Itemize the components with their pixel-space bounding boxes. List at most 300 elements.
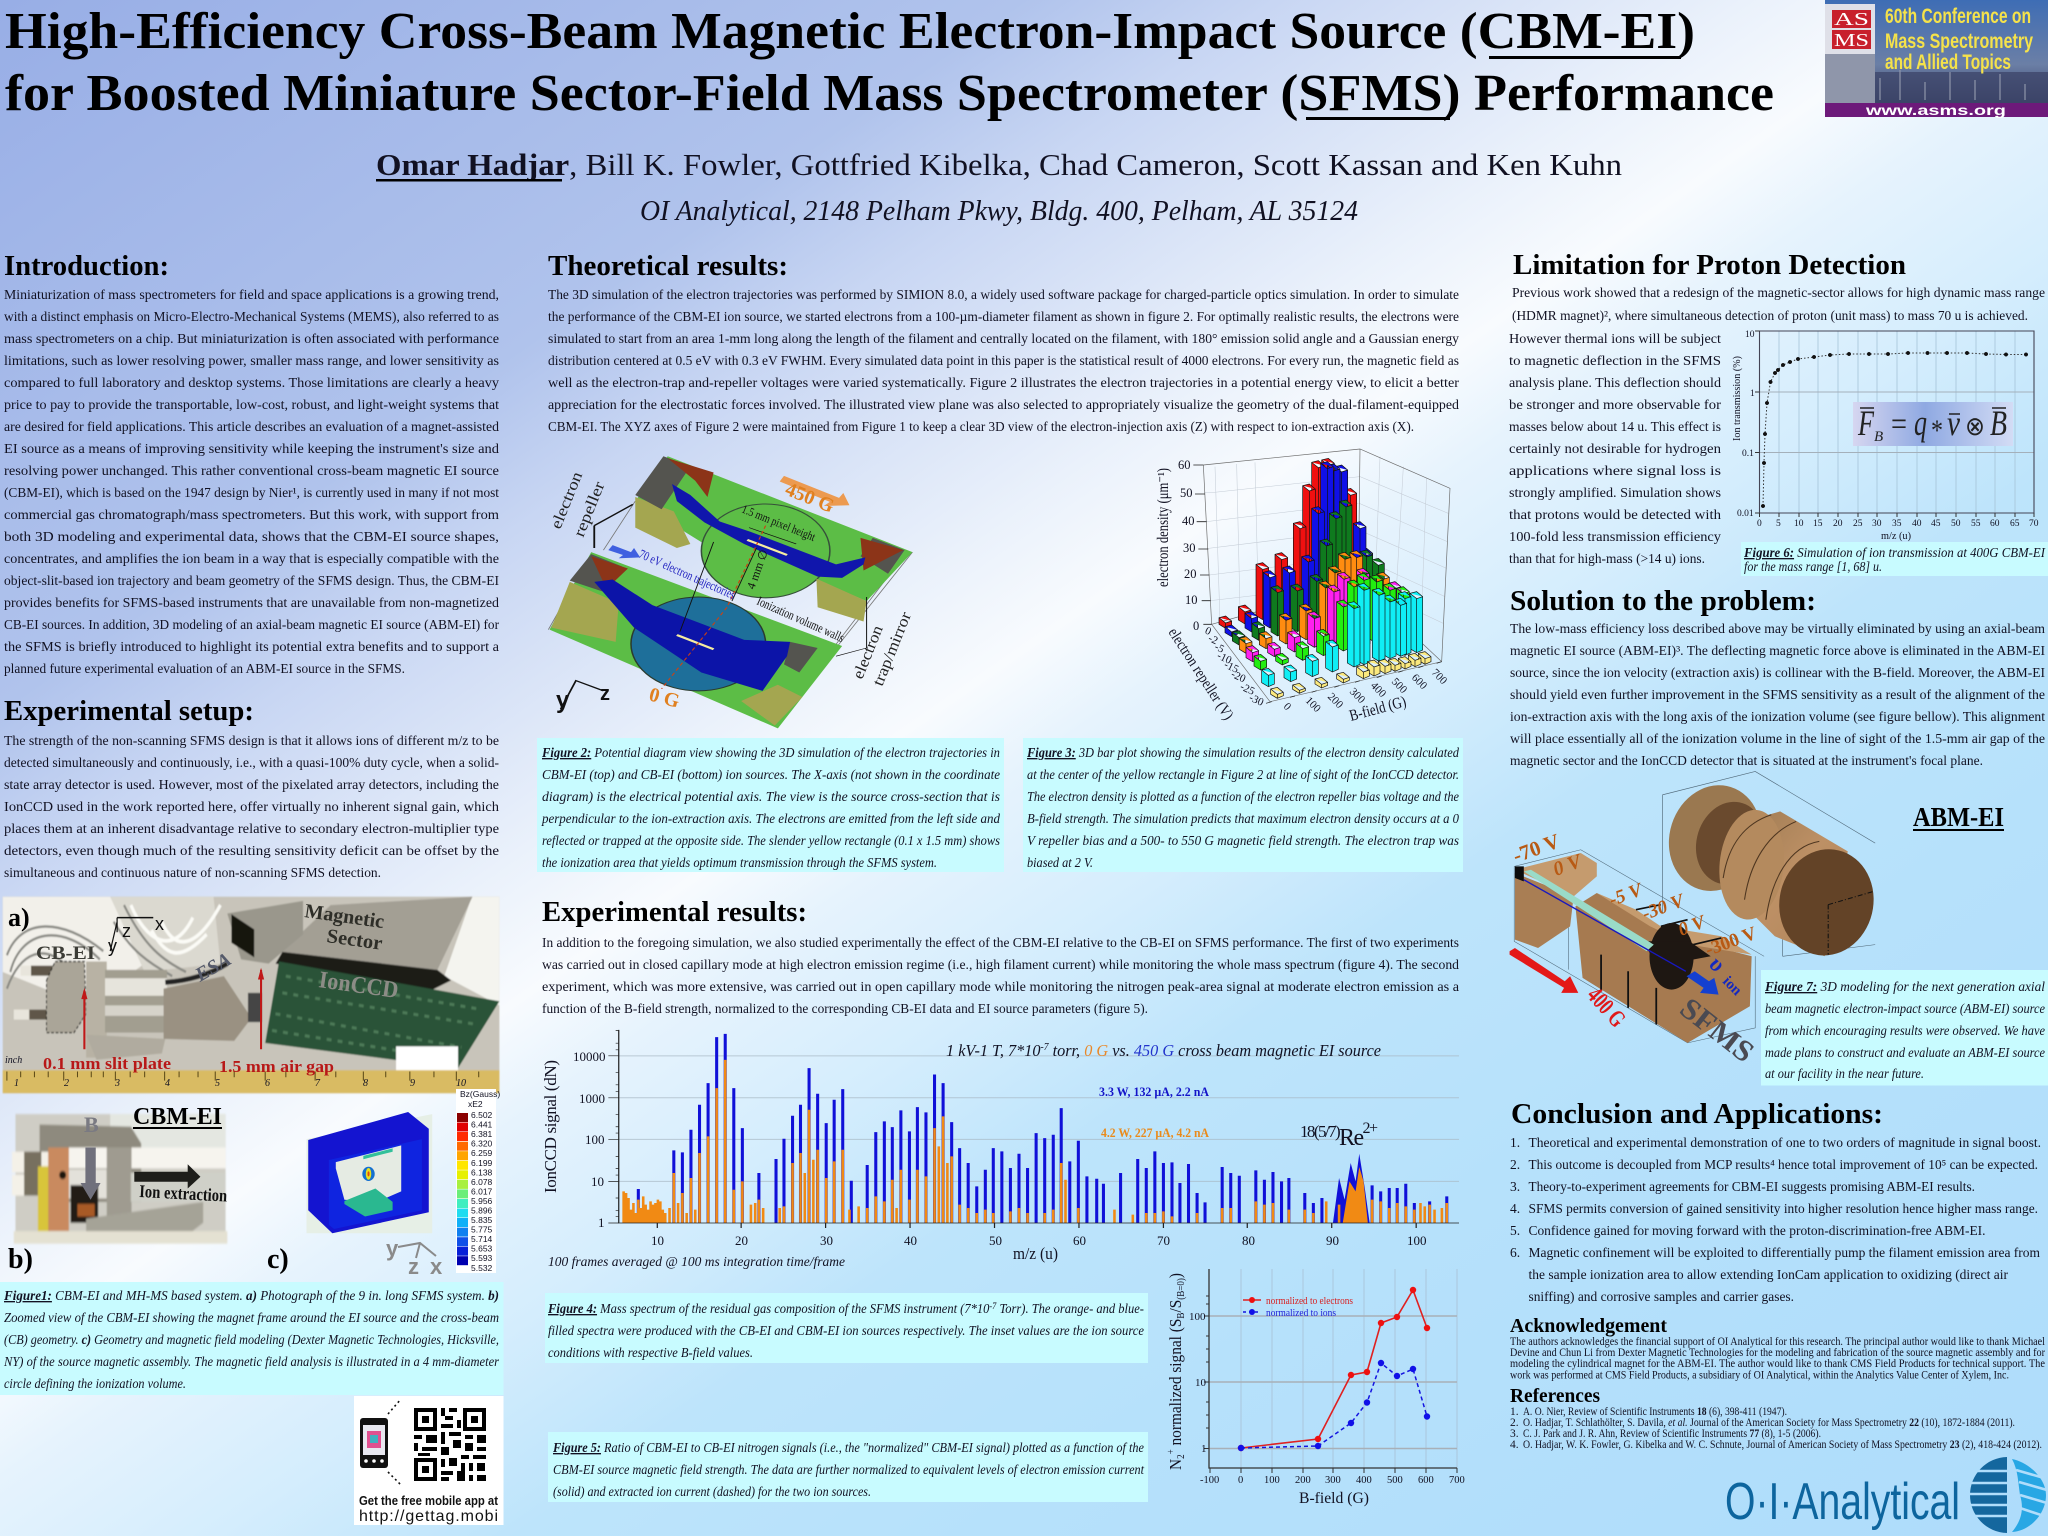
- figure 1a: instrument photograph: [3, 897, 499, 1093]
- axis labels: 70: [2029, 519, 2039, 529]
- figure 2 labels: y: [556, 687, 570, 714]
- numbered list: Magnetic confinement will be exploited to differentially pump the filament emission area from: [1528, 1245, 2040, 1260]
- reference list: O. Hadjar, W. K. Fowler, G. Kibelka and W. C. Schnute, Journal of American Society of Mass Spectrometry 23 (2), 418-424 (2012).: [1523, 1439, 2042, 1451]
- spectrum axis labels: IonCCD signal (dN): [541, 1060, 560, 1193]
- blue conditions: 3.3 W, 132 µA, 2.2 nA: [1099, 1085, 1209, 1099]
- spectrum inset title: torr,: [1049, 1041, 1084, 1060]
- caption: figure 5: (solid) and extracted ion current (dashed) for the two ion sources.: [553, 1484, 871, 1499]
- text block: experimental setup: detectors, even though much of the resulting sensitivity deficit can be offset by the: [4, 843, 499, 858]
- text block: limitation: masses below about 14 u. This effect is: [1509, 419, 1721, 434]
- figure 3 labels: 100: [1303, 695, 1323, 715]
- spectrum inset title: -7: [1041, 1042, 1049, 1053]
- label: ion extraction: Ion extraction: [139, 1181, 228, 1206]
- title: High-Efficiency Cross-Beam Magnetic Electron-Impact Source (CBM-EI): [5, 3, 1695, 60]
- text block: introduction: planned future experimental evaluation of an ABM-EI source in the SFMS.: [4, 661, 405, 676]
- chart axis labels: 1: [1201, 1443, 1206, 1455]
- panel: theoretical results: [548, 251, 1460, 434]
- chart axis labels: 300: [1325, 1475, 1341, 1486]
- orange conditions: 4.2 W, 227 µA, 4.2 nA: [1101, 1126, 1209, 1140]
- text block: introduction: [4, 287, 500, 676]
- text block: limitation: to magnetic deflection in the SFMS: [1509, 353, 1721, 368]
- axis labels: 0: [1757, 519, 1762, 529]
- figure 3 labels: 600: [1409, 672, 1430, 692]
- title: for Boosted Miniature Sector-Field Mass Spectrometer (SFMS) Performance: [5, 65, 1774, 122]
- figure 3 labels: electron density (μm⁻¹): [1155, 468, 1172, 587]
- photo labels: 5: [215, 1078, 220, 1089]
- figure 3 labels: -5: [1213, 641, 1226, 656]
- axis labels: [1732, 330, 2039, 542]
- chart axis labels: B: [1176, 1312, 1187, 1319]
- text block: limitation: certainly not desirable for hydrogen: [1509, 441, 1721, 456]
- conference logo: [1825, 0, 2048, 118]
- caption: figure 1: Zoomed view of the CBM-EI showing the magnet frame around the EI source and the cross-beam: [4, 1310, 499, 1325]
- spectrum axis labels: m/z (u): [1013, 1244, 1058, 1263]
- blue CBM-EI spectrum: [638, 1034, 1447, 1223]
- photo labels: 4: [165, 1078, 170, 1089]
- caption: figure 2: Figure 2: Potential diagram view showing the 3D simulation of the electron trajectories in: [541, 745, 1000, 760]
- formula: Lorentz force: ⊗: [1965, 412, 1985, 442]
- figure 3 labels: B-field (G): [1348, 693, 1408, 725]
- caption: figure 1: [0, 1282, 504, 1395]
- axis labels: 30: [1872, 519, 1882, 529]
- reference list: [1510, 1406, 2042, 1451]
- text block: experimental results: experiment, which was more extensive, was carried out in open capillary mode while monitoring the nitrogen peak-area signal at moderate electron emission as a: [542, 979, 1459, 994]
- text block: introduction: are desired for field applications. This article describes an evaluation of a magnet-assisted: [4, 419, 499, 434]
- text block: theoretical results: distribution centered at 0.5 eV with 0.3 eV FWHM. Every simulated data point in this paper is the statistical result of 4000 electrons. For every run, the magnetic field as: [548, 353, 1459, 368]
- reference list: O. Hadjar, T. Schlathölter, S. Davila, et al. Journal of the American Society for Mass Spectrometry 22 (10), 1872-1884 (2011).: [1523, 1417, 2015, 1429]
- formula: Lorentz force: B: [1990, 403, 2007, 443]
- OI Analytical logo: O·I·Analytical: [1725, 1473, 1960, 1531]
- text block: limitation: 100-fold less transmission efficiency: [1509, 529, 1721, 544]
- figure 7 labels: -30 V: [1640, 890, 1688, 925]
- text block: solution: The low-mass efficiency loss described above may be virtually eliminated by using an axial-beam: [1510, 621, 2045, 636]
- reference list: 4.: [1510, 1439, 1519, 1451]
- chart axis labels: +: [1166, 1449, 1177, 1454]
- spectrum inset title: 1 kV-1 T, 7*10: [946, 1041, 1045, 1060]
- figure 3 labels: 40: [1182, 514, 1194, 528]
- text block: experimental setup: places them at an inherent disadvantage relative to secondary electron-multiplier type: [4, 821, 499, 836]
- text block: solution: magnetic EI source (ABM-EI)³. The deflecting magnetic force above is eliminated in the ABM-EI: [1510, 643, 2046, 658]
- axis labels: 0.01: [1737, 509, 1754, 519]
- numbered list: 5.: [1510, 1223, 1520, 1238]
- label: CBM-EI: CBM-EI: [133, 1104, 222, 1130]
- axis labels: 10: [1794, 519, 1804, 529]
- spectrum axis labels: 10: [591, 1174, 604, 1189]
- spectrum axis labels: 50: [989, 1233, 1002, 1248]
- QR code: [414, 1408, 486, 1481]
- chart axis labels: [1166, 1273, 1465, 1507]
- formula: Lorentz force: F: [1857, 403, 1875, 443]
- colour scale legend: 6.259: [471, 1148, 493, 1158]
- colour scale legend: 5.593: [471, 1253, 493, 1263]
- photo labels: [5, 900, 466, 1089]
- figure 7 labels: 400 G: [1582, 983, 1630, 1033]
- spectrum axis labels: 40: [904, 1233, 917, 1248]
- figure 7 labels: -70 V: [1510, 829, 1563, 868]
- spectrum axis labels: 30: [820, 1233, 833, 1248]
- heading: theoretical results: Theoretical results:: [548, 251, 788, 282]
- figure 3 labels: electron repeller (V): [1165, 625, 1237, 723]
- axis labels: 60: [1990, 519, 2000, 529]
- text block: theoretical results: well as the electron-trap and-repeller voltages were varied systematically. Figure 2 illustrates the electron trajectories in a potential energy view, to elicit a better: [548, 375, 1460, 390]
- text block: introduction: with a distinct emphasis on Micro-Electro-Mechanical Systems (MEMS), also referred to as: [4, 309, 499, 324]
- photo labels: 9: [410, 1078, 415, 1089]
- text block: experimental setup: detected simultaneously and continuously, i.e., with a quasi-100% duty cycle, when a solid-: [4, 755, 499, 770]
- text block: introduction: compared to full laboratory and desktop systems. Those limitations are clearly a heavy: [4, 375, 499, 390]
- text block: solution: magnetic sector and the IonCCD detector that is situated at the instrument's focal plane.: [1510, 753, 1983, 768]
- series: normalized to electrons: [1238, 1287, 1430, 1451]
- photo labels: 7: [315, 1078, 321, 1089]
- conference logo: MS: [1834, 30, 1869, 50]
- heading: introduction: Introduction:: [4, 251, 169, 282]
- figure 3 labels: 30: [1183, 541, 1196, 555]
- caption: figure 4: Torr). The orange- and blue-: [996, 1301, 1144, 1316]
- panel: experimental setup: [4, 696, 499, 880]
- formula: Lorentz force: B: [1874, 429, 1883, 445]
- caption: figure 3: biased at 2 V.: [1027, 855, 1093, 870]
- text block: theoretical results: appreciation for the electrostatic forces involved. The illustrated view plane was also selected to appropriately visualize the geometry of the dual-filament-equipped: [548, 397, 1459, 412]
- text block: introduction: commercial gas chromatograph/mass spectrometers. But this work, with support from: [4, 507, 500, 522]
- numbered list: Theory-to-experiment agreements for CBM-EI suggests promising ABM-EI results.: [1528, 1179, 1975, 1194]
- label: c): c): [267, 1244, 289, 1275]
- axis labels: 5: [1776, 519, 1781, 529]
- figure 2 labels: Ionization volume walls: [755, 593, 847, 645]
- text block: limitation: that protons would be detected with: [1509, 507, 1721, 522]
- spectrum axis labels: 90: [1326, 1233, 1339, 1248]
- caption: figure 4: Figure 4: Mass spectrum of the residual gas composition of the SFMS instrument (7*10: [548, 1301, 1020, 1316]
- panel: introduction: [4, 251, 500, 676]
- text block: solution: ion-extraction axis with the long axis of the ionization volume (see figure bellow). This alignment: [1510, 709, 2045, 724]
- icon: globe: [1970, 1457, 2047, 1533]
- caption: figure 4: -7: [989, 1301, 997, 1311]
- source cross-section block: [1510, 850, 1764, 1043]
- text block: introduction: concentrates, and amplifies the ion beam in a way that is especially compatible with the: [4, 551, 499, 566]
- QR code panel: [354, 1396, 504, 1525]
- axis labels: 20: [1833, 519, 1843, 529]
- text block: experimental results: In addition to the foregoing simulation, we also studied experimentally the effect of the CBM-EI relative to the CB-EI on SFMS performance. The first of two experiments: [542, 935, 1459, 950]
- figure 3 labels: 700: [1429, 667, 1450, 687]
- text block: limitation: strongly amplified. Simulation shows: [1509, 485, 1721, 500]
- spectrum axis labels: 80: [1242, 1233, 1255, 1248]
- data series: [1761, 351, 2028, 508]
- figure 3 labels: 20: [1184, 567, 1196, 581]
- chart axis labels: 200: [1295, 1475, 1311, 1486]
- figure 3 labels: 50: [1180, 486, 1192, 500]
- heading: conclusion: Conclusion and Applications:: [1511, 1099, 1883, 1130]
- text block: limitation: Previous work showed that a redesign of the magnetic-sector allows for high dynamic mass range: [1512, 285, 2045, 300]
- photo labels: Magnetic: [303, 900, 386, 933]
- text block: introduction: Miniaturization of mass spectrometers for field and space applications is a growing trend,: [4, 287, 499, 302]
- figure 7 labels: -5 V: [1607, 879, 1646, 911]
- chart axis labels: 10: [1195, 1377, 1206, 1389]
- caption: figure 1: Figure1: CBM-EI and MH-MS based system. a) Photograph of the 9 in. long SFMS system. b): [3, 1288, 499, 1303]
- panel: experimental results: [542, 897, 1459, 1016]
- caption: figure 4: conditions with respective B-field values.: [548, 1345, 753, 1360]
- text block: introduction: resolving power unchanged. This rather conventional cross-beam magnetic EI source: [4, 463, 499, 478]
- colour scale legend: 6.199: [471, 1158, 493, 1168]
- photo labels: 1.5 mm air gap: [219, 1057, 334, 1076]
- caption: figure 2: [537, 738, 1004, 872]
- axis labels: Ion transmission (%): [1732, 356, 1743, 441]
- text: url: http://gettag.mobi: [359, 1508, 498, 1525]
- figure 2 labels: z: [600, 683, 610, 705]
- numbered list: SFMS permits conversion of gained sensitivity into higher resolution hence higher mass range.: [1528, 1201, 2038, 1216]
- heading: references: References: [1510, 1385, 1600, 1407]
- spectrum axis labels: 1: [598, 1215, 604, 1230]
- chart axis labels: 2: [1176, 1454, 1187, 1459]
- colour scale legend: 5.896: [471, 1206, 493, 1216]
- photo labels: x: [155, 914, 164, 934]
- heading: limitation: Limitation for Proton Detection: [1513, 250, 1906, 281]
- photo labels: inch: [5, 1055, 22, 1066]
- text block: experimental setup: state array detector is used. However, most of the pixelated array detectors, including the: [4, 777, 499, 792]
- caption: figure 2: reflected or trapped at the opposite side. The slender yellow rectangle (0.1 x 1.5 mm) shows: [542, 833, 1000, 848]
- photo labels: 10: [456, 1078, 466, 1089]
- colour scale legend: 6.320: [471, 1139, 493, 1149]
- figure 3 labels: -25: [1238, 681, 1257, 698]
- text block: limitation: (HDMR magnet)², where simultaneous detection of proton (unit mass) to mass 70 u is achieved.: [1512, 308, 2028, 323]
- spectrum axis labels: 20: [735, 1233, 748, 1248]
- axis labels: 15: [1813, 519, 1823, 529]
- chart axis labels: N: [1166, 1458, 1185, 1470]
- caption: figure 3: V repeller bias and a 500- to 550 G magnetic field strength. The electron trap was: [1027, 833, 1459, 848]
- text block: solution: [1510, 621, 2046, 768]
- colour scale legend: 5.835: [471, 1215, 493, 1225]
- chart axis labels: normalized signal (S: [1166, 1319, 1185, 1449]
- panel: limitation for proton detection: [1509, 250, 2045, 566]
- figure 2 labels: 1.5 mm pixel height: [740, 502, 818, 544]
- chart legend: normalized to electrons: [1266, 1295, 1353, 1307]
- axis labels: 0.1: [1742, 449, 1754, 459]
- figure 3 labels: 200: [1325, 691, 1346, 711]
- colour scale legend: 5.532: [471, 1263, 493, 1273]
- text block: theoretical results: The 3D simulation of the electron trajectories was performed by SIMION 8.0, a widely used software package for charged-particle optics simulation. In order to simulate: [548, 287, 1459, 302]
- caption: figure 1: NY) of the source magnetic assembly. The magnetic field analysis is illustrated in a 4 mm-diameter: [3, 1354, 500, 1369]
- caption: figure 1: circle defining the ionization volume.: [4, 1376, 186, 1391]
- colour scale legend: 6.138: [471, 1167, 493, 1177]
- figure 7 labels: 0 V: [1676, 911, 1709, 941]
- figure 7 labels: υ: [1705, 951, 1729, 977]
- text block: experimental setup: IonCCD used in the work reported here, offer virtually no inherent signal gain, which: [4, 799, 499, 814]
- figure 3 labels: [1155, 458, 1450, 725]
- figure 7 labels: [1510, 829, 1760, 1069]
- rhenium peak label: 2+: [1363, 1120, 1378, 1137]
- axis labels: 55: [1971, 519, 1981, 529]
- chart axis labels: B-field (G): [1299, 1490, 1369, 1507]
- axis labels: 40: [1912, 519, 1922, 529]
- caption: figure 4: [545, 1293, 1148, 1363]
- chart axis labels: 100: [1189, 1311, 1206, 1323]
- photo labels: CB-EI: [36, 943, 95, 964]
- text block: experimental setup: simultaneous and continuous nature of non-scanning SFMS detection.: [4, 865, 381, 880]
- spectrum inset title: 0 G vs. 450 G cross beam magnetic EI source: [1084, 1041, 1390, 1060]
- chart axis labels: 500: [1387, 1475, 1403, 1486]
- spectrum axis labels: 100: [1407, 1233, 1426, 1248]
- caption: figure 7: Figure 7: 3D modeling for the next generation axial: [1764, 979, 2045, 994]
- panel: conclusion and applications: [1510, 1099, 2041, 1304]
- icon: phone: [360, 1399, 401, 1485]
- photo labels: 1: [14, 1078, 19, 1089]
- figure 2 labels: 0 G: [647, 684, 682, 713]
- photo labels: 2: [64, 1078, 69, 1089]
- heading: experimental setup: Experimental setup:: [4, 696, 254, 727]
- text block: limitation: [1509, 285, 2045, 566]
- panel: acknowledgement: [1510, 1315, 2045, 1382]
- figure 2 labels: repeller: [571, 479, 609, 539]
- affiliation: OI Analytical, 2148 Pelham Pkwy, Bldg. 400, Pelham, AL 35124: [640, 195, 1358, 227]
- orange CB-EI spectrum: [624, 1060, 1447, 1223]
- text block: solution: source, since the ion velocity (extraction axis) is collinear with the B-field. Moreover, the ABM-EI: [1510, 665, 2045, 680]
- text block: introduction: limitations, such as lower resolving power, smaller mass range, and lower sensitivity as: [4, 353, 499, 368]
- chart axis labels: 600: [1418, 1475, 1434, 1486]
- text block: experimental results: function of the B-field strength, normalized to the corresponding CB-EI data and EI source parameters (figure 5).: [542, 1001, 1148, 1016]
- chart axis labels: 400: [1356, 1475, 1372, 1486]
- caption: figure 1: (CB) geometry. c) Geometry and magnetic field modeling (Dexter Magnetic Technologies, Hicksville,: [4, 1332, 499, 1347]
- text block: experimental results: [542, 935, 1459, 1016]
- text block: limitation: than that for high-mass (>14 u) ions.: [1509, 551, 1705, 566]
- figure 7: ABM-EI 3D model: [1510, 771, 2004, 1069]
- numbered list: Confidence gained for moving forward with the proton-discrimination-free ABM-EI.: [1528, 1223, 1986, 1238]
- figure 2 labels: 450 G: [782, 478, 838, 518]
- chart axis labels: -100: [1200, 1475, 1219, 1486]
- caption: figure 6: [1741, 542, 2048, 576]
- axis triad: [386, 1236, 443, 1279]
- text block: experimental results: was carried out in closed capillary mode at high electron emission regime (i.e., high filament current) while monitoring the whole mass spectrum (figure 4). The second: [542, 957, 1459, 972]
- figure 3 labels: -20: [1229, 668, 1248, 686]
- caption: figure 6: for the mass range [1, 68] u.: [1744, 559, 1882, 574]
- figure 3 labels: 400: [1368, 680, 1389, 700]
- formula: Lorentz force: v: [1947, 403, 1960, 443]
- figure 3 labels: 0: [1193, 619, 1199, 633]
- caption: figure 3: Figure 3: 3D bar plot showing the simulation results of the electron density calculated: [1026, 745, 1459, 760]
- text block: solution: will place essentially all of the ionization volume in the line of sight of the 1.5-mm air gap of the: [1510, 731, 2045, 746]
- photo labels: y: [108, 936, 117, 956]
- caption: figure 5: CBM-EI source magnetic field strength. The data are further normalized to equivalent levels of electron emission current: [553, 1462, 1145, 1477]
- series: normalized to ions: [1238, 1360, 1430, 1451]
- photo labels: a): [8, 903, 30, 932]
- figure 7 labels: SFMS: [1674, 992, 1760, 1069]
- axis triad: x: [430, 1254, 443, 1279]
- figure 3 labels: 0: [1281, 701, 1294, 713]
- figure 3 labels: -30: [1247, 692, 1266, 709]
- colour scale legend: xE2: [468, 1099, 483, 1109]
- chart axis labels: 700: [1449, 1475, 1465, 1486]
- caption: figure 2: diagram) is the electrical potential axis. The view is the source cross-section that is: [542, 789, 1000, 804]
- text block: experimental setup: The strength of the non-scanning SFMS design is that it allows ions of different m/z to be: [4, 733, 499, 748]
- chart legend: normalized to ions: [1266, 1307, 1336, 1319]
- figure 2 labels: [548, 469, 915, 714]
- spectrum axis labels: [541, 1049, 1426, 1270]
- label: magnetic field B: B: [84, 1112, 99, 1137]
- formula: Lorentz force: *: [1931, 414, 1943, 447]
- chart axis labels: 100: [1264, 1475, 1280, 1486]
- wireframe box: [1663, 771, 1875, 956]
- axis labels: 45: [1931, 519, 1941, 529]
- caption: figure 3: B-field strength. The simulation predicts that maximum electron density occurs at a 0: [1027, 811, 1459, 826]
- text block: introduction: provides benefits for SFMS-based instruments that are unavailable from non-magnetized: [4, 595, 499, 610]
- colour scale legend: Bz(Gauss): [460, 1089, 500, 1099]
- axis labels: 25: [1853, 519, 1863, 529]
- spectrum axis labels: 10000: [573, 1049, 606, 1064]
- text: get the app: Get the free mobile app at: [359, 1493, 499, 1508]
- text block: theoretical results: the performance of the CBM-EI ion source, we started electrons from a 100-µm-diameter filament as shown in figure 2. For optimally realistic results, the electrons were: [548, 309, 1459, 324]
- text block: introduction: the SFMS is briefly introduced to highlight its potential extra benefits and to support a: [4, 639, 499, 654]
- text block: solution: should yield even further improvement in the SFMS sensitivity as a result of the alignment of the: [1510, 687, 2045, 702]
- text block: theoretical results: CBM-EI. The XYZ axes of Figure 2 were maintained from Figure 1 to keep a clear 3D view of the electron-injection axis (Z) with respect to ion-extraction axis (X).: [548, 419, 1414, 434]
- axis labels: 1: [1750, 389, 1755, 399]
- colour scale legend: 6.017: [471, 1186, 493, 1196]
- chart: normalized signal vs B-field (figure 5): [1166, 1269, 1465, 1507]
- axis labels: 50: [1951, 519, 1961, 529]
- text block: limitation: applications where signal loss is: [1509, 463, 1721, 478]
- formula: Lorentz force: [1853, 402, 2013, 447]
- label: ABM-EI: ABM-EI: [1913, 802, 2004, 832]
- figure 1b: CBM-EI photograph: [8, 1104, 228, 1275]
- colour scale legend: 5.956: [471, 1196, 493, 1206]
- figure 3 labels: 300: [1347, 686, 1368, 706]
- title: [5, 3, 1774, 122]
- figure 1c: magnetic field model: [267, 1089, 500, 1279]
- reference list: 1.: [1510, 1406, 1519, 1418]
- numbered list: [1510, 1135, 2041, 1304]
- caption: figure 2: the ionization area that yields optimum transmission through the SFMS system.: [542, 855, 937, 870]
- figure 3 labels: 10: [1185, 593, 1198, 607]
- caption: figure 7: [1761, 970, 2048, 1086]
- text block: theoretical results: [548, 287, 1460, 434]
- axis labels: 10: [1745, 330, 1755, 340]
- caption: figure 2: CBM-EI (top) and CB-EI (bottom) ion sources. The X-axis (not shown in the coordinate: [542, 767, 1000, 782]
- figure 3 labels: 60: [1178, 458, 1190, 472]
- chart axis labels: ): [1166, 1273, 1185, 1278]
- figure 3 labels: -10: [1215, 650, 1234, 667]
- conference logo: AS: [1834, 9, 1869, 29]
- colour scale legend: 6.078: [471, 1177, 493, 1187]
- axis labels: 65: [2010, 519, 2020, 529]
- panel: solution to the problem: [1510, 586, 2046, 768]
- figure 2 labels: 4 mm ∅: [744, 548, 771, 591]
- spectrum axis labels: 70: [1157, 1233, 1170, 1248]
- cylinder magnet: [1659, 777, 1881, 961]
- caption: figure 2: perpendicular to the ion-extraction axis. The electrons are emitted from the left side and: [541, 811, 1000, 826]
- axis labels: 35: [1892, 519, 1902, 529]
- chart legend: [1243, 1295, 1353, 1319]
- text block: acknowledgement: [1510, 1336, 2045, 1382]
- text block: introduction: both 3D modeling and experimental data, shows that the CBM-EI source shapes,: [4, 529, 499, 544]
- colour scale legend: 6.502: [471, 1110, 493, 1120]
- figure 3 labels: -15: [1222, 659, 1241, 676]
- numbered list: 3.: [1510, 1179, 1520, 1194]
- chart axis labels: /S: [1166, 1300, 1185, 1313]
- numbered list: sniffing) and corrosive samples and carrier gases.: [1528, 1289, 1794, 1304]
- photo labels: Sector: [325, 925, 384, 955]
- colour scale legend: [456, 1089, 500, 1273]
- figure 3 labels: -2: [1206, 632, 1220, 647]
- text block: experimental setup: [4, 733, 499, 880]
- chart axis labels: 0: [1238, 1475, 1243, 1486]
- heading: solution: Solution to the problem:: [1510, 586, 1816, 617]
- caption: figure 5: [548, 1432, 1148, 1502]
- formula: Lorentz force: =: [1891, 406, 1907, 443]
- text block: introduction: EI source as a means of improving sensitivity while keeping the instrument's size and: [4, 441, 499, 456]
- figure 7 labels: 0 V: [1550, 850, 1586, 881]
- spectrum axis labels: 100: [585, 1132, 604, 1147]
- figure 3 labels: 500: [1389, 676, 1410, 696]
- chart axis labels: (B=0): [1176, 1278, 1187, 1300]
- figure 3: 3D bar plot: [1155, 449, 1450, 725]
- text block: theoretical results: simulated to start from an area 1-mm long along the length of the filament and centrally located on the filament, with 180° emission solid angle and a Gaussian energy: [548, 331, 1459, 346]
- reference list: 3.: [1510, 1428, 1519, 1440]
- text block: limitation: However thermal ions will be subject: [1509, 331, 1721, 346]
